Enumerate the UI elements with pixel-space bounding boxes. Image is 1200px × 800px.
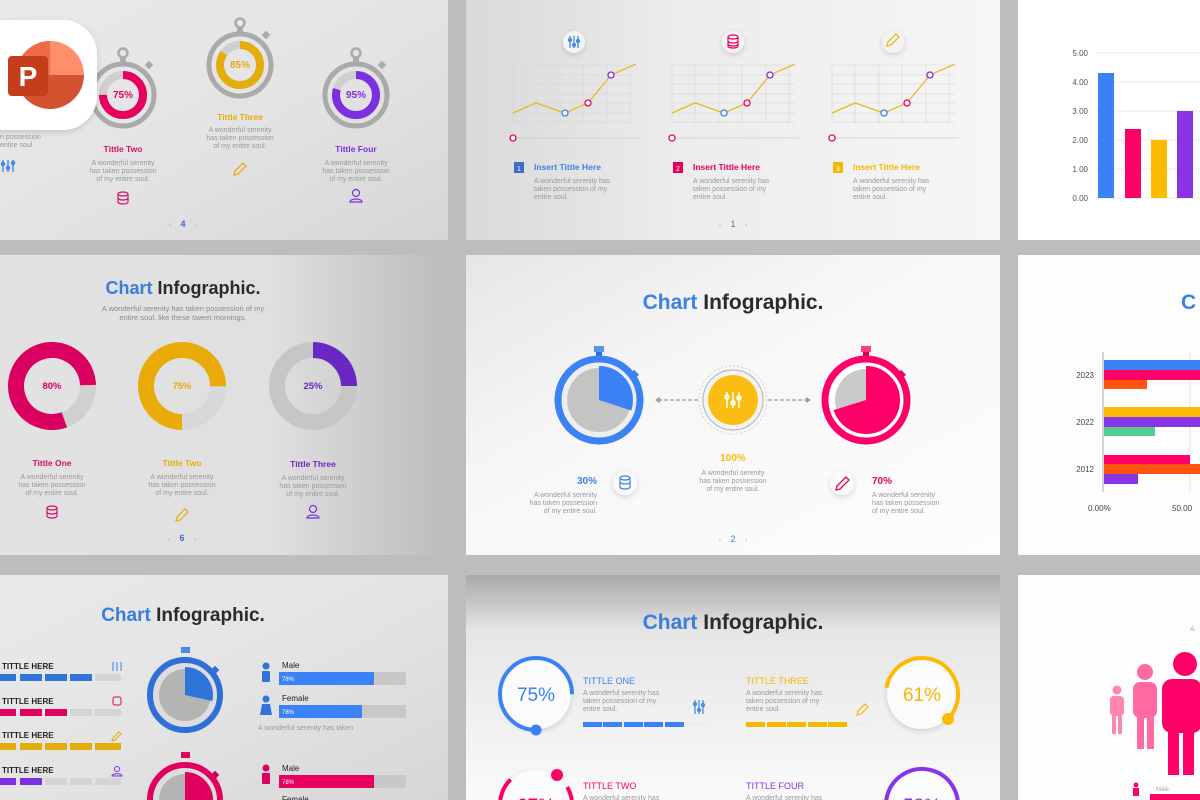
ring 75% blue bbox=[500, 658, 572, 736]
pager 1: ‹ bbox=[719, 223, 721, 229]
slide: top-right bar chart: 5.00 bbox=[1072, 49, 1089, 58]
text: 30%: A wonderful serenity bbox=[534, 492, 597, 499]
text: tittle three: Tittle Three bbox=[217, 112, 263, 122]
stopwatch: tittle three 85%: 85% bbox=[230, 60, 250, 71]
text: tittle two: Tittle Two bbox=[163, 458, 201, 468]
slide: bottom-left progress bbox=[0, 575, 448, 800]
text: tittle one bbox=[583, 678, 684, 727]
chart panel 1: taken possession of my bbox=[534, 186, 608, 193]
donut 75% bbox=[146, 350, 218, 422]
text: tittle four: A wonderful serenity bbox=[324, 160, 388, 167]
chart panel 3: Insert Tittle Here bbox=[853, 162, 920, 172]
slide: bottom-right people bbox=[1018, 575, 1200, 800]
pager 1: › bbox=[745, 223, 747, 229]
pager 6: 6 bbox=[179, 533, 185, 543]
slide: center featured stopwatches bbox=[466, 255, 1000, 555]
text: tittle one: taken possession of my bbox=[583, 698, 657, 705]
gender bars blue: 78% bbox=[282, 677, 295, 683]
text: tittle three: of my entire soul. bbox=[213, 143, 267, 150]
pager 6 bbox=[168, 533, 196, 543]
text: tittle three: has taken possession bbox=[279, 483, 347, 490]
text: tittle three: TITTLE THREE bbox=[746, 676, 809, 686]
pager 1: 1 bbox=[730, 219, 736, 229]
ring 75% blue: 75% bbox=[517, 685, 555, 706]
gender bars blue bbox=[258, 661, 406, 732]
progress rows: TITTLE HERE bbox=[2, 697, 54, 706]
slide: middle-right horizontal bar chart: C bbox=[1181, 291, 1196, 314]
text: tittle three: A wonderful serenity bbox=[208, 127, 272, 134]
chart panel 2: taken possession of my bbox=[693, 186, 767, 193]
pager 6: › bbox=[194, 537, 196, 543]
slide: bottom-right people: A bbox=[1190, 626, 1195, 633]
text: tittle three bbox=[206, 112, 274, 150]
pager 1 bbox=[719, 219, 747, 229]
pager 6: ‹ bbox=[168, 537, 170, 543]
text: tittle two bbox=[89, 144, 157, 183]
pager 4 bbox=[169, 220, 197, 227]
donut 25%: 25% bbox=[303, 381, 323, 392]
slide: top-right bar chart: 0.00 bbox=[1072, 194, 1089, 203]
ring 61% yellow bbox=[884, 656, 960, 733]
progress rows bbox=[0, 662, 121, 785]
text: tittle two: has taken possession bbox=[148, 482, 216, 489]
slide: bottom-middle ring progress bbox=[466, 575, 1000, 800]
chart panel 2 bbox=[669, 31, 799, 201]
gender bars pink: 78% bbox=[282, 780, 295, 786]
stopwatch: tittle two 75% bbox=[92, 48, 154, 126]
text: tittle three: of my entire soul. bbox=[286, 491, 340, 498]
slide: middle-left donuts bbox=[0, 255, 448, 555]
chart panel 2: entire soul. bbox=[693, 194, 727, 201]
text: 100%: 100% bbox=[720, 453, 746, 464]
title: Chart Infographic. bbox=[643, 291, 823, 314]
male legend: Male bbox=[1156, 787, 1170, 793]
chart panel 3: entire soul. bbox=[853, 194, 887, 201]
ring purple lower bbox=[884, 766, 960, 800]
progress rows: TITTLE HERE bbox=[2, 662, 54, 671]
text: tittle two: A wonderful serenity bbox=[150, 474, 214, 481]
text: tittle three: has taken possession bbox=[206, 135, 274, 142]
progress rows: TITTLE HERE bbox=[2, 766, 54, 775]
text: tittle one: entire soul. bbox=[583, 706, 617, 713]
icon: pencil yellow bbox=[234, 163, 246, 175]
text: tittle two: of my entire soul. bbox=[96, 176, 150, 183]
text: tittle three: entire soul. bbox=[746, 706, 780, 713]
text: 70%: A wonderful serenity bbox=[872, 492, 936, 499]
male legend bbox=[1133, 782, 1200, 800]
pager 2: 2 bbox=[730, 534, 736, 544]
chart panel 2: A wonderful serenity has bbox=[693, 178, 770, 185]
icon: sliders blue bbox=[1, 160, 15, 172]
progress rows: TITTLE HERE bbox=[2, 731, 54, 740]
text: 30%: has taken possession bbox=[530, 500, 597, 507]
text: tittle one: Tittle One bbox=[32, 458, 72, 468]
slide: top-left stopwatches bbox=[0, 0, 448, 240]
text: tittle three bbox=[746, 678, 847, 727]
chart panel 2: 2 bbox=[676, 166, 680, 173]
text: 70%: has taken possession bbox=[872, 500, 939, 507]
title: Chart Infographic. bbox=[101, 605, 265, 626]
stopwatch: tittle four 95% bbox=[325, 48, 387, 126]
slide: middle-right horizontal bar chart: 2023 bbox=[1076, 371, 1095, 380]
text: tittle three: A wonderful serenity has bbox=[746, 690, 823, 697]
subtitle: entire soul, like these sweet mornings. bbox=[119, 313, 247, 322]
text: tittle one: A wonderful serenity bbox=[20, 474, 84, 481]
text: 70% bbox=[872, 476, 939, 515]
icon: database circle bbox=[613, 471, 637, 495]
donut 80%: 80% bbox=[42, 381, 62, 392]
arrow left bbox=[655, 397, 698, 403]
text: 30% bbox=[530, 476, 597, 515]
slide: top-right bar chart: 2.00 bbox=[1072, 136, 1089, 145]
text: tittle two: of my entire soul. bbox=[155, 490, 209, 497]
text: tittle four bbox=[322, 144, 390, 183]
text: 100%: has taken possession bbox=[699, 478, 767, 485]
icon: user purple bbox=[350, 190, 362, 202]
slide: top-right bar chart bbox=[1018, 0, 1200, 240]
pager 2: › bbox=[745, 538, 747, 544]
text: tittle three: A wonderful serenity bbox=[281, 475, 345, 482]
partial left text: entire soul. bbox=[0, 142, 34, 149]
icon: powerpoint badge bbox=[0, 20, 97, 130]
stopwatch blue bbox=[150, 647, 220, 730]
gender bars pink bbox=[262, 764, 406, 800]
text: tittle two / four: TITTLE TWO bbox=[583, 781, 636, 791]
slide: top-middle line charts bbox=[466, 0, 1000, 240]
ring pink lower bbox=[498, 769, 574, 800]
people figures bbox=[1110, 652, 1200, 775]
text: 100% bbox=[699, 453, 767, 493]
text: tittle four: of my entire soul. bbox=[329, 176, 383, 183]
text: tittle three: taken possession of my bbox=[746, 698, 820, 705]
arrow right bbox=[768, 397, 811, 403]
text: tittle two: A wonderful serenity bbox=[91, 160, 155, 167]
gender bars blue: A wonderful serenity has taken bbox=[258, 725, 353, 732]
stopwatch: tittle two 75%: 75% bbox=[113, 90, 133, 101]
icon: powerpoint badge: P bbox=[19, 61, 37, 92]
chart panel 1: Insert Tittle Here bbox=[534, 162, 601, 172]
gender bars blue: Female bbox=[282, 694, 309, 703]
icon: database pink bbox=[118, 192, 128, 204]
gender bars blue: 78% bbox=[282, 710, 295, 716]
text: 70%: 70% bbox=[872, 476, 892, 487]
donut 75%: 75% bbox=[172, 381, 192, 392]
text: tittle three: Tittle Three bbox=[290, 459, 336, 469]
text: tittle two: Tittle Two bbox=[104, 144, 142, 154]
text: tittle one bbox=[18, 458, 86, 497]
slide: middle-right horizontal bar chart: 2022 bbox=[1076, 418, 1095, 427]
stopwatch blue 30% bbox=[558, 346, 640, 441]
text: tittle four: Tittle Four bbox=[335, 144, 377, 154]
stopwatch: tittle three 85% bbox=[209, 18, 271, 96]
chart panel 2: Insert Tittle Here bbox=[693, 162, 760, 172]
icon: pencil bbox=[857, 704, 868, 715]
text: tittle one: A wonderful serenity has bbox=[583, 690, 660, 697]
gender bars pink: Male bbox=[282, 764, 300, 773]
icon: sliders bbox=[694, 700, 704, 714]
text: tittle one: has taken possession bbox=[18, 482, 86, 489]
pager 4: ‹ bbox=[169, 223, 171, 229]
chart panel 3: taken possession of my bbox=[853, 186, 927, 193]
stopwatch pink bbox=[150, 752, 220, 800]
slide: top-right bar chart: 3.00 bbox=[1072, 107, 1089, 116]
slide: top-right bar chart: 4.00 bbox=[1072, 78, 1089, 87]
text: tittle two bbox=[148, 458, 216, 497]
ring 61% yellow: 61% bbox=[903, 685, 941, 706]
chart panel 1: 1 bbox=[517, 166, 521, 173]
slide: middle-right horizontal bar chart: 2012 bbox=[1076, 465, 1095, 474]
pager 4: › bbox=[195, 223, 197, 229]
chart panel 1 bbox=[510, 31, 640, 201]
icons row bbox=[47, 506, 319, 521]
chart panel 1: entire soul. bbox=[534, 194, 568, 201]
chart panel 1: A wonderful serenity has bbox=[534, 178, 611, 185]
text: tittle one: TITTLE ONE bbox=[583, 676, 635, 686]
center yellow icon circle bbox=[699, 366, 767, 434]
subtitle: A wonderful serenity has taken possession of my bbox=[102, 304, 264, 313]
chart panel 3: 3 bbox=[836, 166, 840, 173]
text: tittle four: has taken possession bbox=[322, 168, 390, 175]
title: Chart Infographic. bbox=[643, 611, 823, 634]
text: 70%: of my entire soul. bbox=[872, 508, 925, 515]
chart panel 3 bbox=[829, 31, 959, 201]
slide: top-right bar chart: 1.00 bbox=[1072, 165, 1089, 174]
text: 30%: of my entire soul. bbox=[544, 508, 597, 515]
small icons bbox=[112, 662, 122, 776]
slide: middle-right horizontal bar chart: 50.00 bbox=[1172, 504, 1193, 513]
icon: pencil circle bbox=[830, 471, 854, 495]
donut 80% bbox=[6, 340, 98, 432]
partial left text bbox=[0, 134, 40, 147]
subtitle bbox=[102, 304, 264, 322]
text: tittle two: has taken possession bbox=[89, 168, 157, 175]
stopwatch pink 70% bbox=[825, 346, 907, 441]
partial left text: n possession bbox=[0, 134, 41, 141]
pager 2 bbox=[719, 534, 747, 544]
slide: middle-right horizontal bar chart bbox=[1018, 255, 1200, 555]
gender bars blue: Male bbox=[282, 661, 300, 670]
text: tittle one: of my entire soul. bbox=[25, 490, 79, 497]
chart panel 3: A wonderful serenity has bbox=[853, 178, 930, 185]
slide: middle-right horizontal bar chart: 0.00% bbox=[1088, 504, 1111, 513]
text: 100%: of my entire soul. bbox=[706, 486, 760, 493]
text: 30%: 30% bbox=[577, 476, 597, 487]
title: Chart Infographic. bbox=[105, 278, 261, 298]
text: tittle three bbox=[279, 459, 347, 498]
text: tittle two / four bbox=[583, 781, 823, 800]
text: tittle two / four: TITTLE FOUR bbox=[746, 781, 804, 791]
pager 2: ‹ bbox=[719, 538, 721, 544]
donut 25% bbox=[277, 350, 349, 422]
stopwatch: tittle four 95%: 95% bbox=[346, 90, 366, 101]
text: 100%: A wonderful serenity bbox=[701, 470, 765, 477]
pager 4: 4 bbox=[180, 219, 186, 229]
